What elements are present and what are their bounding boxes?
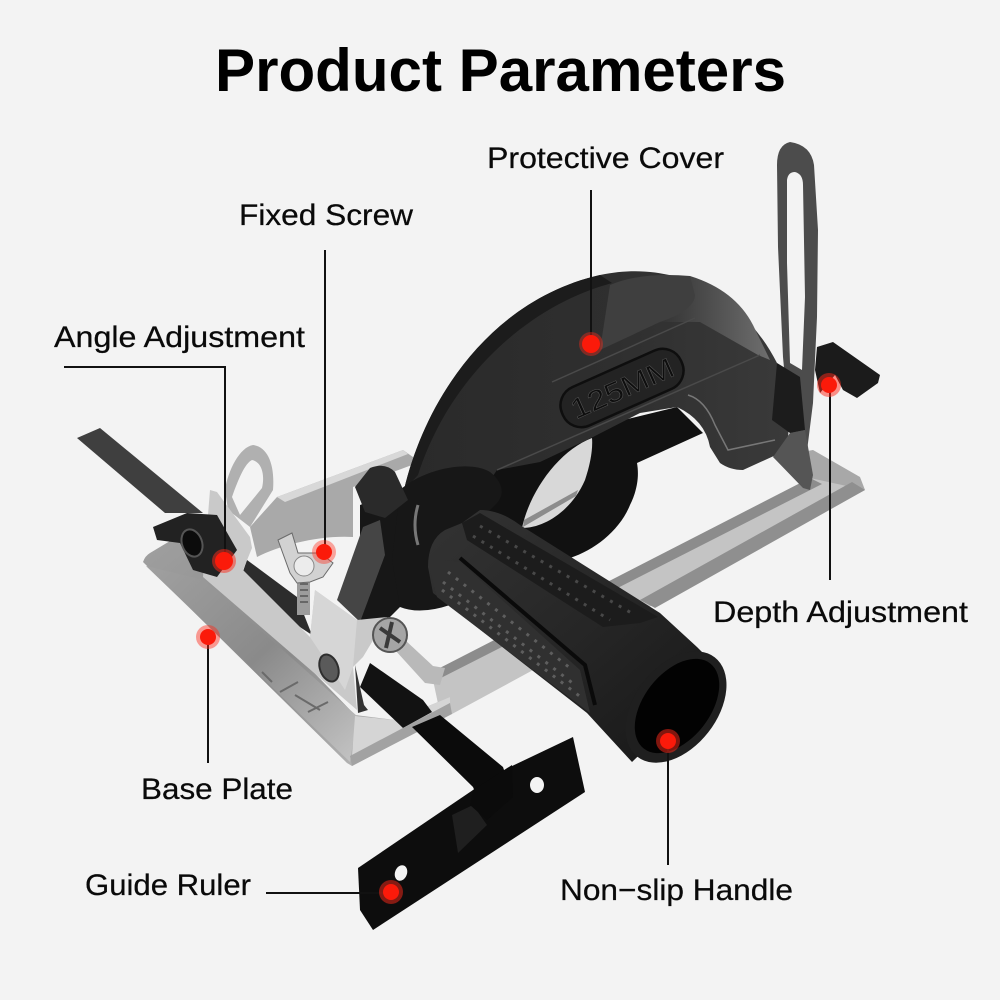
callout: Non-slip Handle <box>560 729 793 907</box>
title: Product Parameters <box>215 37 786 104</box>
protective cover <box>404 271 790 558</box>
rear frame of base plate <box>250 450 865 714</box>
callout: Non-slip Handle: Non−slip Handle <box>560 874 793 907</box>
callout: Angle Adjustment <box>54 321 306 573</box>
marker <box>379 880 403 904</box>
ruler passing over the plate <box>360 663 432 728</box>
marker <box>817 373 841 397</box>
lower grip insert <box>430 558 595 713</box>
upper grip insert <box>462 513 658 627</box>
guide ruler bracket <box>358 715 585 930</box>
depth adjustment bracket <box>772 142 880 490</box>
callout: Fixed Screw <box>239 199 413 564</box>
handle mount <box>337 466 502 622</box>
marker <box>312 540 336 564</box>
callout: Fixed Screw: Fixed Screw <box>239 199 413 232</box>
callout: Base Plate: Base Plate <box>141 773 293 806</box>
callout: Depth Adjustment: Depth Adjustment <box>713 596 969 629</box>
callout: Guide Ruler: Guide Ruler <box>85 869 251 902</box>
callout: Protective Cover: Protective Cover <box>487 142 724 175</box>
125MM badge <box>554 342 690 434</box>
marker <box>656 729 680 753</box>
marker <box>579 332 603 356</box>
125MM badge: 125MM <box>566 352 679 425</box>
callout: Base Plate <box>141 625 293 806</box>
angle adjustment knob <box>153 513 237 577</box>
callout: Protective Cover <box>487 142 724 356</box>
base plate <box>143 535 452 766</box>
callout: Angle Adjustment: Angle Adjustment <box>54 321 306 354</box>
bracket with fixing screw <box>203 490 407 713</box>
inner ring and arch shadow <box>470 407 703 558</box>
rubber handle grip <box>428 510 747 782</box>
marker <box>196 625 220 649</box>
guide ruler scale <box>77 428 312 635</box>
callout: Guide Ruler <box>85 869 403 904</box>
marker <box>212 549 236 573</box>
callout: Depth Adjustment <box>713 373 969 629</box>
angle adjustment tab <box>225 445 273 527</box>
wing screw <box>278 533 333 615</box>
product illustration: angle grinder cutting stand <box>77 142 880 930</box>
